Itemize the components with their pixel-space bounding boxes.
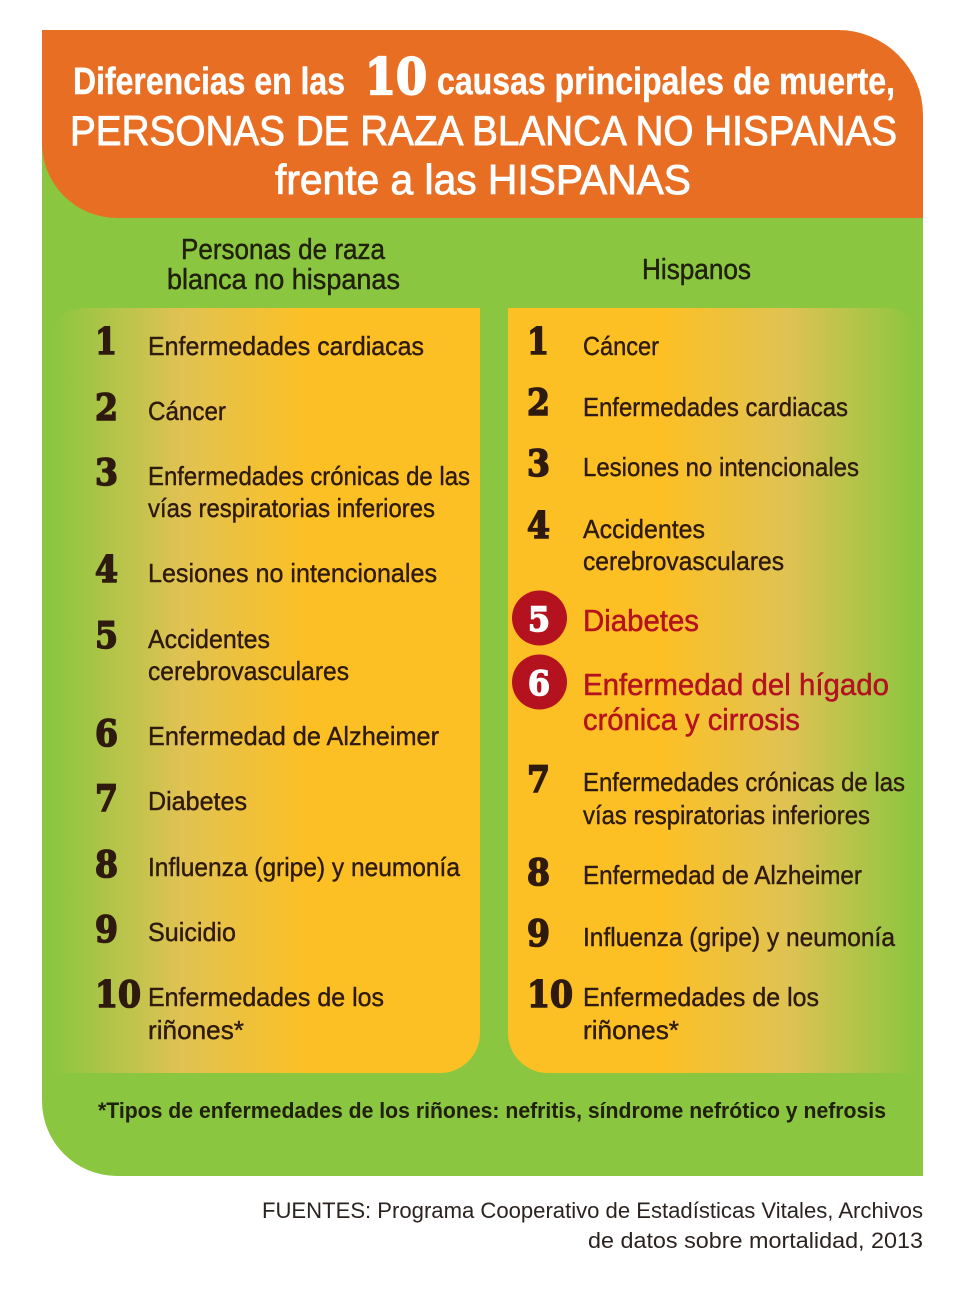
list: right column causes: 10 [527, 974, 573, 1016]
source [262, 1198, 923, 1253]
list: left column causes: vías respiratorias inferiores [148, 493, 435, 523]
list: right column causes: 7 [527, 759, 550, 801]
list: left column causes: Enfermedades de los [148, 982, 384, 1012]
highlighted cause: liver disease: Enfermedad del hígado [583, 667, 889, 702]
panel: left list background [50, 308, 480, 1073]
list: right column causes: 9 [527, 913, 550, 955]
list: right column causes: Enfermedades de los [583, 982, 819, 1012]
list: right column causes: Cáncer [583, 331, 659, 361]
list: right column causes: 1 [527, 321, 549, 363]
title: 10 [365, 47, 427, 106]
heading: left column [167, 234, 400, 296]
list: right column causes: 3 [527, 443, 550, 485]
list: left column causes: Accidentes [148, 624, 270, 654]
footnote: *Tipos de enfermedades de los riñones: nefritis, síndrome nefrótico y nefrosis [98, 1098, 886, 1123]
list: left column causes: 7 [95, 778, 118, 820]
list: left column causes: riñones* [148, 1015, 244, 1045]
list: left column causes: 3 [95, 452, 118, 494]
list: left column causes: 5 [95, 615, 118, 657]
list: right column causes [512, 321, 905, 1045]
list: left column causes: Diabetes [148, 786, 247, 816]
heading: left column: blanca no hispanas [167, 264, 400, 296]
list: right column causes: riñones* [583, 1015, 679, 1045]
list: right column causes: 2 [527, 382, 550, 424]
highlighted number 6 [512, 654, 567, 710]
title: PERSONAS DE RAZA BLANCA NO HISPANAS [70, 107, 897, 154]
list: left column causes: Enfermedad de Alzheimer [148, 721, 439, 751]
title: frente a las HISPANAS [275, 156, 691, 203]
heading: right column: Hispanos [642, 254, 751, 286]
highlighted cause: liver disease [583, 667, 889, 737]
list: left column causes: 6 [95, 713, 118, 755]
list: right column causes: Accidentes [583, 514, 705, 544]
source: FUENTES: Programa Cooperativo de Estadísticas Vitales, Archivos [262, 1198, 923, 1223]
list: left column causes: Enfermedades cardiacas [148, 331, 424, 361]
list: right column causes: Influenza (gripe) y neumonía [583, 922, 896, 952]
list: left column causes: 4 [95, 549, 118, 591]
list: left column causes: cerebrovasculares [148, 656, 349, 686]
title [70, 47, 897, 203]
heading: left column: Personas de raza [181, 234, 386, 266]
list: right column causes: 8 [527, 852, 550, 894]
list: left column causes: Lesiones no intencionales [148, 558, 437, 588]
source: de datos sobre mortalidad, 2013 [588, 1228, 923, 1253]
title: causas principales de muerte, [437, 61, 895, 103]
list: right column causes: Enfermedad de Alzheimer [583, 860, 862, 890]
highlighted cause: Diabetes: Diabetes [583, 603, 699, 638]
list: left column causes: 8 [95, 844, 118, 886]
list: left column causes [95, 321, 470, 1045]
highlighted number 5 [512, 590, 567, 646]
list: left column causes: Influenza (gripe) y neumonía [148, 852, 461, 882]
list: left column causes: Cáncer [148, 396, 226, 426]
panel: right list background [508, 308, 918, 1073]
highlighted number 5: 5 [528, 600, 550, 640]
list: right column causes: Enfermedades crónicas de las [583, 767, 905, 797]
list: right column causes: cerebrovasculares [583, 546, 784, 576]
list: left column causes: Enfermedades crónicas de las [148, 461, 470, 491]
list: left column causes: 2 [95, 387, 118, 429]
panel: green background [42, 120, 923, 1176]
list: right column causes: 4 [527, 505, 550, 547]
list: left column causes: 9 [95, 909, 118, 951]
highlighted number 6: 6 [528, 664, 550, 704]
list: left column causes: 10 [95, 974, 141, 1016]
title: Diferencias en las [73, 61, 345, 103]
list: left column causes: 1 [95, 321, 117, 363]
highlighted cause: liver disease: crónica y cirrosis [583, 702, 800, 737]
panel: orange title banner [42, 30, 923, 218]
list: left column causes: Suicidio [148, 917, 236, 947]
list: right column causes: Lesiones no intencionales [583, 452, 859, 482]
list: right column causes: vías respiratorias inferiores [583, 800, 870, 830]
list: right column causes: Enfermedades cardiacas [583, 392, 848, 422]
